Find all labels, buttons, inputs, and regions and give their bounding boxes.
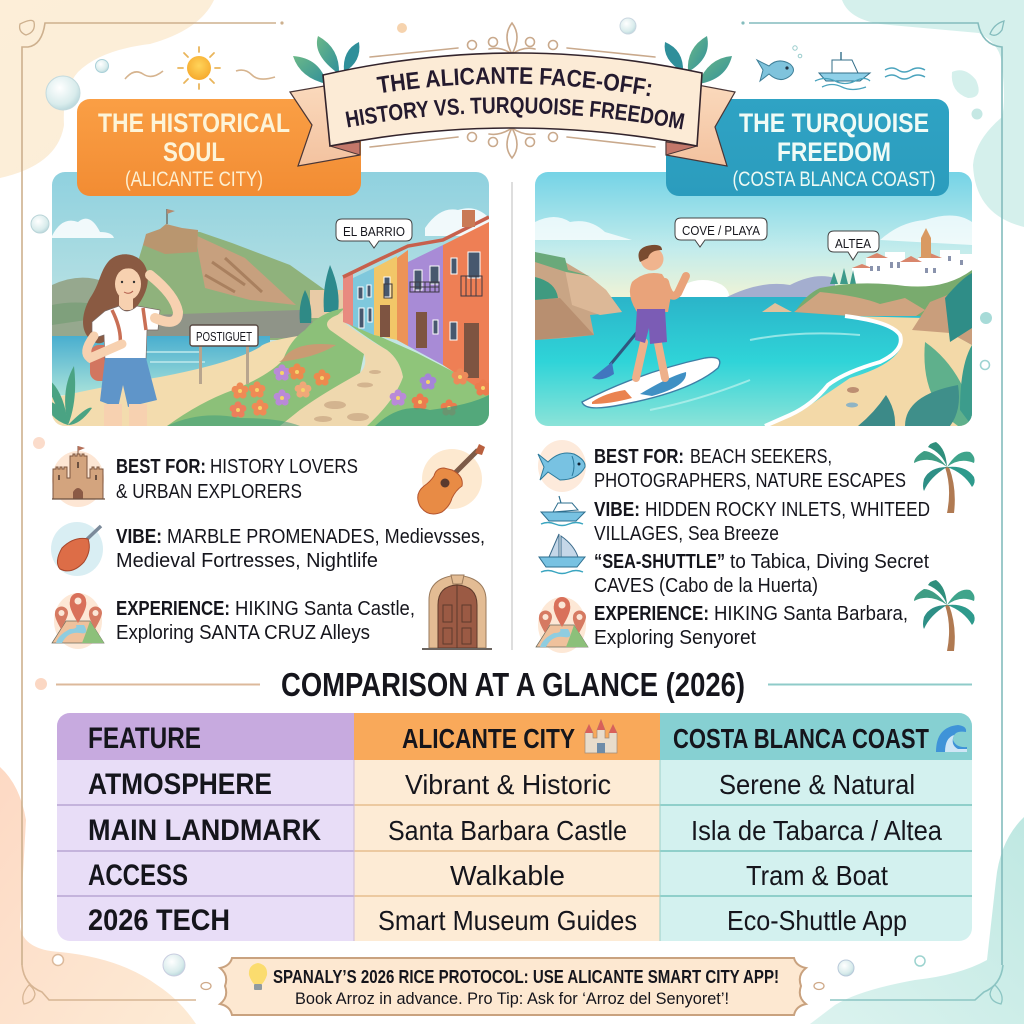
panel: Costa Blanca details bbox=[536, 440, 975, 653]
leaves bbox=[293, 36, 732, 84]
text: experience: EXPERIENCE: bbox=[116, 598, 230, 620]
icon: map pins bbox=[52, 593, 104, 649]
icon: map pins bbox=[536, 597, 588, 653]
row: 2026 tech: Eco-Shuttle App bbox=[727, 905, 907, 936]
paddleboarder bbox=[630, 245, 686, 378]
table header: ALICANTE CITY bbox=[402, 723, 575, 754]
text: experience bbox=[594, 603, 908, 649]
icon: door bbox=[422, 575, 492, 649]
text: best for: PHOTOGRAPHERS, NATURE ESCAPES bbox=[594, 470, 906, 492]
text: vibe: VILLAGES, Sea Breeze bbox=[594, 523, 779, 545]
text: vibe bbox=[594, 499, 930, 545]
row: main landmark: MAIN LANDMARK bbox=[88, 814, 321, 847]
icon: lute bbox=[51, 522, 103, 576]
text: experience: HIKING Santa Barbara, bbox=[714, 603, 908, 625]
row: access: ACCESS bbox=[88, 859, 188, 892]
row: main landmark bbox=[88, 814, 942, 847]
text: experience: Exploring SANTA CRUZ Alleys bbox=[116, 622, 370, 644]
heading: The Historical Soul bbox=[77, 99, 361, 196]
label: Cove / Playa bbox=[675, 218, 767, 247]
text: sea-shuttle: “SEA-SHUTTLE” bbox=[594, 551, 725, 573]
panel: Alicante City details bbox=[51, 444, 492, 649]
row: main landmark: Isla de Tabarca / Altea bbox=[691, 815, 942, 846]
label: Altea: ALTEA bbox=[835, 236, 871, 251]
colourful houses bbox=[343, 210, 489, 395]
icon: castle emoji bbox=[585, 719, 617, 753]
heading: The Turquoise Freedom: FREEDOM bbox=[777, 137, 891, 167]
icon: fish bbox=[538, 440, 586, 492]
row: access: Walkable bbox=[450, 860, 565, 891]
heading: The Historical Soul: (ALICANTE CITY) bbox=[125, 168, 263, 191]
text: vibe: VIBE: bbox=[116, 526, 162, 548]
plant bbox=[52, 366, 92, 425]
paddle and board bbox=[581, 332, 720, 408]
text: best for: & URBAN EXPLORERS bbox=[116, 481, 302, 503]
label: El Barrio: EL BARRIO bbox=[343, 224, 405, 239]
table backgrounds bbox=[57, 713, 972, 941]
row: 2026 tech: Smart Museum Guides bbox=[378, 905, 637, 936]
heading: comparison at a glance: COMPARISON AT A GLANCE (2026) bbox=[281, 666, 745, 703]
icon: motor boat bbox=[541, 496, 585, 526]
text: experience: EXPERIENCE: bbox=[594, 603, 709, 625]
row: atmosphere: Vibrant & Historic bbox=[405, 769, 611, 800]
row: 2026 tech bbox=[88, 904, 907, 937]
row: atmosphere bbox=[88, 768, 915, 801]
text: sea-shuttle bbox=[594, 551, 929, 597]
text: vibe: Medieval Fortresses, Nightlife bbox=[116, 550, 378, 572]
callout: rice protocol tip: SPANALY’S 2026 RICE PROTOCOL: USE ALICANTE SMART CITY APP! bbox=[273, 967, 779, 987]
icon: light bulb bbox=[249, 963, 267, 990]
row: access bbox=[88, 859, 888, 892]
text: best for: BEST FOR: bbox=[116, 456, 206, 478]
text: experience: HIKING Santa Castle, bbox=[235, 598, 415, 620]
icon: palm tree bbox=[914, 580, 975, 651]
row: 2026 tech: 2026 TECH bbox=[88, 904, 230, 937]
heading: The Turquoise Freedom bbox=[666, 99, 949, 196]
icon: castle bbox=[52, 446, 105, 507]
text: vibe: VIBE: bbox=[594, 499, 640, 521]
row: atmosphere: ATMOSPHERE bbox=[88, 768, 272, 801]
row: access: Tram & Boat bbox=[746, 860, 888, 891]
sign: Postiguet: POSTIGUET bbox=[196, 330, 252, 344]
text: best for bbox=[116, 456, 358, 503]
row: atmosphere: Serene & Natural bbox=[719, 769, 915, 800]
title banner bbox=[289, 22, 736, 167]
title text: THE ALICANTE FACE-OFF: bbox=[376, 67, 652, 96]
comparison table bbox=[57, 713, 972, 941]
beach foliage bbox=[858, 342, 972, 426]
text: best for: HISTORY LOVERS bbox=[210, 456, 358, 478]
text: best for: BEST FOR: bbox=[594, 446, 684, 468]
icon: wave emoji bbox=[936, 725, 967, 752]
label: Cove / Playa: COVE / PLAYA bbox=[682, 223, 760, 238]
text: experience bbox=[116, 598, 415, 644]
heading: The Historical Soul: SOUL bbox=[163, 137, 225, 167]
icon: sailboat bbox=[539, 534, 585, 574]
text: vibe: MARBLE PROMENADES, Medievsses, bbox=[167, 526, 485, 548]
callout: rice protocol tip: Book Arroz in advance. Pro Tip: Ask for ‘Arroz del Senyoret’! bbox=[295, 989, 729, 1008]
icons: fish, boat and waves bbox=[757, 46, 925, 90]
text: sea-shuttle: CAVES (Cabo de la Huerta) bbox=[594, 575, 818, 597]
text: vibe bbox=[116, 526, 485, 572]
row: main landmark: Santa Barbara Castle bbox=[388, 815, 627, 846]
icon: palm tree bbox=[914, 442, 975, 513]
text: best for bbox=[594, 446, 906, 492]
text: sea-shuttle: to Tabica, Diving Secret bbox=[730, 551, 929, 573]
flowers bbox=[230, 363, 491, 418]
text: vibe: HIDDEN ROCKY INLETS, WHITEED bbox=[645, 499, 930, 521]
woman with backpack bbox=[83, 254, 178, 426]
callout: rice protocol tip bbox=[201, 958, 824, 1015]
panel: left illustration, Postiguet and El Barrio bbox=[44, 172, 491, 426]
heading: The Turquoise Freedom: (COSTA BLANCA COAST) bbox=[732, 168, 936, 191]
label: Altea bbox=[828, 231, 879, 260]
icon: guitar bbox=[418, 444, 485, 514]
icon: sun with waves bbox=[125, 47, 275, 89]
text: experience: Exploring Senyoret bbox=[594, 627, 756, 649]
label: El Barrio bbox=[336, 219, 412, 248]
ornamental scrolls bbox=[370, 23, 655, 158]
heading: The Historical Soul: THE HISTORICAL bbox=[98, 108, 290, 138]
table header: FEATURE bbox=[88, 722, 201, 755]
title banner: HISTORY VS. TURQUOISE FREEDOM bbox=[346, 97, 684, 130]
table header bbox=[88, 719, 967, 755]
text: best for: BEACH SEEKERS, bbox=[690, 446, 832, 468]
heading: The Turquoise Freedom: THE TURQUOISE bbox=[739, 108, 929, 138]
panel: right illustration, cove and Altea bbox=[535, 172, 972, 426]
table header: COSTA BLANCA COAST bbox=[673, 723, 929, 754]
sign: Postiguet bbox=[190, 325, 258, 384]
